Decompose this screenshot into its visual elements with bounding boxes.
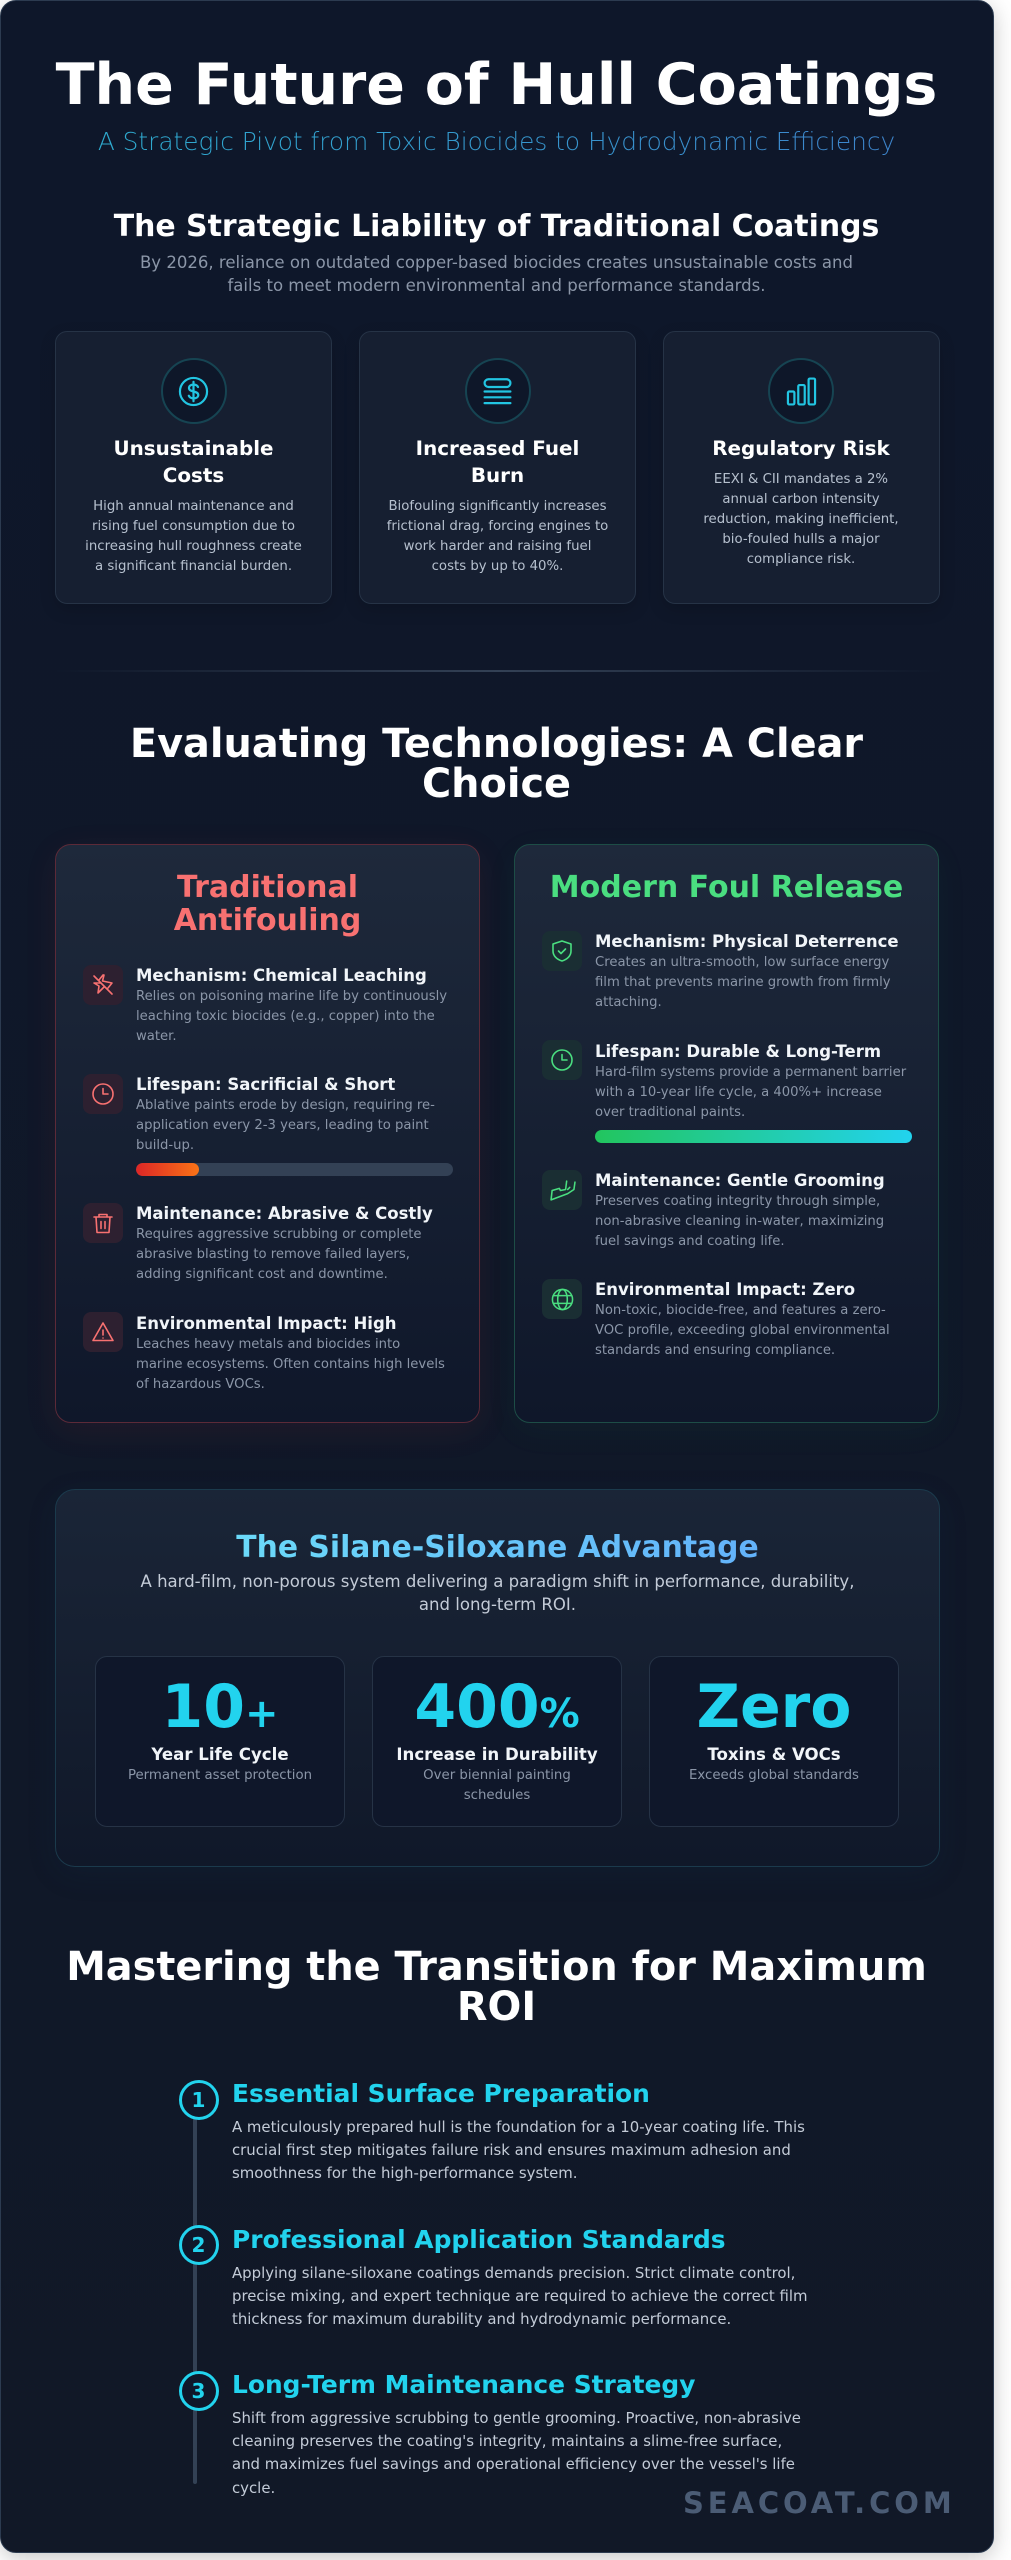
item text <box>136 1227 421 1282</box>
stat note: Over biennial painting <box>423 1768 571 1783</box>
stat: 10+ <box>95 1656 345 1827</box>
icon: globe <box>542 1279 582 1319</box>
lifespan bar: 20% <box>136 1163 453 1176</box>
stat label: Year Life Cycle <box>151 1745 289 1764</box>
item heading: Lifespan: Sacrificial & Short <box>136 1075 395 1094</box>
card text: a significant financial burden. <box>95 559 292 574</box>
step text: A meticulously prepared hull is the foundation for a 10-year coating life. This <box>232 2118 805 2136</box>
card heading <box>113 437 274 486</box>
icon: clock <box>542 1040 582 1080</box>
stat value: 400% <box>414 1672 580 1742</box>
item heading: Mechanism: Physical Deterrence <box>595 932 899 951</box>
step text <box>232 2409 801 2497</box>
stat value: Zero <box>696 1672 852 1742</box>
card text: bio-fouled hulls a major <box>722 532 880 547</box>
step 2 <box>179 2225 808 2328</box>
icon: warning <box>83 1312 123 1352</box>
panel: traditional antifouling <box>55 844 480 1423</box>
item text: Preserves coating integrity through simple, <box>595 1194 880 1209</box>
item: lifespan <box>542 1040 912 1143</box>
step text: precise mixing, and expert technique are required to achieve the correct film <box>232 2287 808 2305</box>
heading: evaluating technologies: Evaluating Technologies: A Clear <box>130 721 863 767</box>
panel text <box>140 1572 854 1614</box>
icon: zap off <box>83 965 123 1005</box>
item text: of hazardous VOCs. <box>136 1377 265 1392</box>
heading: mastering the transition <box>66 1944 927 2030</box>
step number <box>178 2080 218 2120</box>
timeline line <box>193 2101 197 2484</box>
step text: thickness for maximum durability and hydrodynamic performance. <box>232 2310 731 2328</box>
panel text: and long-term ROI. <box>419 1595 576 1614</box>
item: maintenance <box>83 1203 433 1282</box>
card heading: Unsustainable <box>113 437 274 460</box>
stat label: Toxins & VOCs <box>707 1745 841 1764</box>
item heading: Mechanism: Chemical Leaching <box>136 966 427 985</box>
panel heading <box>174 870 361 938</box>
step text: Applying silane-siloxane coatings demands precision. Strict climate control, <box>232 2264 795 2282</box>
item text <box>136 1098 435 1153</box>
intro paragraph: By 2026, reliance on outdated copper-based biocides creates unsustainable costs and <box>140 253 853 272</box>
item text <box>136 989 447 1044</box>
card text <box>703 472 899 567</box>
panel: modern foul release <box>514 844 939 1423</box>
panel: regulatory risk <box>662 331 940 604</box>
step text: cleaning preserves the coating's integrity, maintains a slime-free surface, <box>232 2432 782 2450</box>
item: environmental impact <box>542 1279 890 1358</box>
item text: with a 10-year life cycle, a 400%+ increase <box>595 1085 882 1100</box>
item text: attaching. <box>595 995 662 1010</box>
card heading: Costs <box>163 464 224 486</box>
item text: marine ecosystems. Often contains high levels <box>136 1357 445 1372</box>
heading: evaluating technologies: Choice <box>422 761 571 807</box>
card heading: Regulatory Risk <box>712 437 890 460</box>
card text: rising fuel consumption due to <box>92 519 295 534</box>
item text: Non-toxic, biocide-free, and features a zero- <box>595 1303 886 1318</box>
card text: annual carbon intensity <box>722 492 880 507</box>
item text: film that prevents marine growth from firmly <box>595 975 891 990</box>
card text: High annual maintenance and <box>93 499 294 514</box>
item text: over traditional paints. <box>595 1105 745 1120</box>
step number <box>178 2371 218 2411</box>
panel heading: Antifouling <box>174 902 361 938</box>
icon: grooming <box>542 1170 582 1210</box>
item text <box>595 955 891 1010</box>
item heading: Maintenance: Abrasive & Costly <box>136 1204 433 1223</box>
item text: Creates an ultra-smooth, low surface energy <box>595 955 889 970</box>
step number: 2 <box>192 2233 205 2257</box>
step number <box>178 2225 218 2265</box>
icon: dollar <box>160 358 226 424</box>
stat note: Exceeds global standards <box>689 1768 859 1783</box>
item heading: Environmental Impact: High <box>136 1314 397 1333</box>
step 1 <box>179 2079 805 2182</box>
icon: clock <box>83 1074 123 1114</box>
logo: SEACOAT.COM <box>683 2486 956 2520</box>
card text: Biofouling significantly increases <box>388 499 607 514</box>
item: lifespan <box>83 1074 453 1176</box>
panel heading: The Silane-Siloxane Advantage <box>236 1530 759 1565</box>
card heading: Increased Fuel <box>416 437 579 460</box>
item text: Hard-film systems provide a permanent barrier <box>595 1065 906 1080</box>
panel heading <box>56 1528 939 1568</box>
step text <box>232 2118 805 2182</box>
step number: 1 <box>192 2088 205 2112</box>
item text: non-abrasive cleaning in-water, maximizing <box>595 1214 884 1229</box>
panel heading: Traditional <box>177 870 358 904</box>
item heading: Lifespan: Durable & Long-Term <box>595 1042 881 1061</box>
step number: 3 <box>192 2379 205 2403</box>
item text: Requires aggressive scrubbing or complete <box>136 1227 421 1242</box>
item text: leaching toxic biocides (e.g., copper) into the <box>136 1009 435 1024</box>
item text: fuel savings and coating life. <box>595 1234 785 1249</box>
panel: silane-siloxane advantage <box>55 1489 940 1867</box>
step text: Shift from aggressive scrubbing to gentle grooming. Proactive, non-abrasive <box>232 2409 801 2427</box>
step text: crucial first step mitigates failure risk and ensures maximum adhesion and <box>232 2141 791 2159</box>
stat note: Permanent asset protection <box>128 1768 312 1783</box>
step text: and maximizes fuel savings and operational efficiency over the vessel's life <box>232 2455 795 2473</box>
card text: EEXI & CII mandates a 2% <box>714 472 888 487</box>
item: maintenance <box>542 1170 885 1249</box>
item: mechanism <box>83 965 447 1044</box>
item text: standards and ensuring compliance. <box>595 1343 835 1358</box>
card text: costs by up to 40%. <box>432 559 563 574</box>
panel heading: Modern Foul Release <box>550 870 903 904</box>
item heading: Maintenance: Gentle Grooming <box>595 1171 885 1190</box>
item: environmental impact <box>83 1312 445 1392</box>
subtitle: A Strategic Pivot from Toxic Biocides to Hydrodynamic Efficiency <box>98 127 895 156</box>
panel text: A hard-film, non-porous system delivering a paradigm shift in performance, durability, <box>141 1572 854 1591</box>
step 3 <box>179 2370 801 2497</box>
item: mechanism <box>542 932 899 1010</box>
heading: evaluating technologies <box>130 721 863 807</box>
item text: abrasive blasting to remove failed layers, <box>136 1247 410 1262</box>
item text: adding significant cost and downtime. <box>136 1267 388 1282</box>
icon: shield check <box>542 931 582 971</box>
item text: build-up. <box>136 1138 194 1153</box>
heading: strategic liability: The Strategic Liability of Traditional Coatings <box>114 209 879 244</box>
item text: Leaches heavy metals and biocides into <box>136 1337 400 1352</box>
intro paragraph: fails to meet modern environmental and performance standards. <box>227 276 766 295</box>
item text: Ablative paints erode by design, requiring re- <box>136 1098 435 1113</box>
step heading: Professional Application Standards <box>232 2225 726 2254</box>
stat note <box>423 1768 571 1803</box>
card text <box>85 499 302 574</box>
heading: mastering the transition: Mastering the Transition for Maximum <box>66 1944 927 1990</box>
heading: mastering the transition: ROI <box>457 1984 536 2030</box>
card text: frictional drag, forcing engines to <box>387 519 608 534</box>
icon: bar chart <box>768 358 834 424</box>
panel: increased fuel burn <box>359 331 636 604</box>
item text: Relies on poisoning marine life by continuously <box>136 989 447 1004</box>
step heading: Essential Surface Preparation <box>232 2079 650 2108</box>
item text <box>595 1303 890 1358</box>
step text: smoothness for the high-performance system. <box>232 2164 578 2182</box>
stat value: 10+ <box>161 1672 278 1742</box>
card heading <box>416 437 579 486</box>
card text: reduction, making inefficient, <box>703 512 899 527</box>
icon: trash <box>83 1203 123 1243</box>
panel: unsustainable costs <box>55 331 332 604</box>
step text: cycle. <box>232 2479 275 2497</box>
icon: layers <box>464 358 530 424</box>
stat: 400% <box>372 1656 622 1827</box>
card text <box>387 499 608 574</box>
lifespan bar: 100% <box>595 1130 912 1143</box>
step text <box>232 2264 808 2328</box>
item text: water. <box>136 1029 177 1044</box>
card text: compliance risk. <box>747 552 855 567</box>
title: The Future of Hull Coatings <box>56 52 937 118</box>
step heading: Long-Term Maintenance Strategy <box>232 2370 695 2399</box>
card heading: Burn <box>471 464 524 486</box>
card text: work harder and raising fuel <box>404 539 591 554</box>
stat: zero <box>649 1656 899 1827</box>
item text <box>595 1065 906 1120</box>
item text: VOC profile, exceeding global environmental <box>595 1323 890 1338</box>
card text: increasing hull roughness create <box>85 539 302 554</box>
stat note: schedules <box>464 1788 530 1803</box>
item text <box>595 1194 884 1249</box>
stat label: Increase in Durability <box>396 1745 598 1764</box>
item text <box>136 1337 445 1392</box>
item heading: Environmental Impact: Zero <box>595 1280 855 1299</box>
intro paragraph <box>140 253 853 295</box>
item text: application every 2-3 years, leading to paint <box>136 1118 429 1133</box>
